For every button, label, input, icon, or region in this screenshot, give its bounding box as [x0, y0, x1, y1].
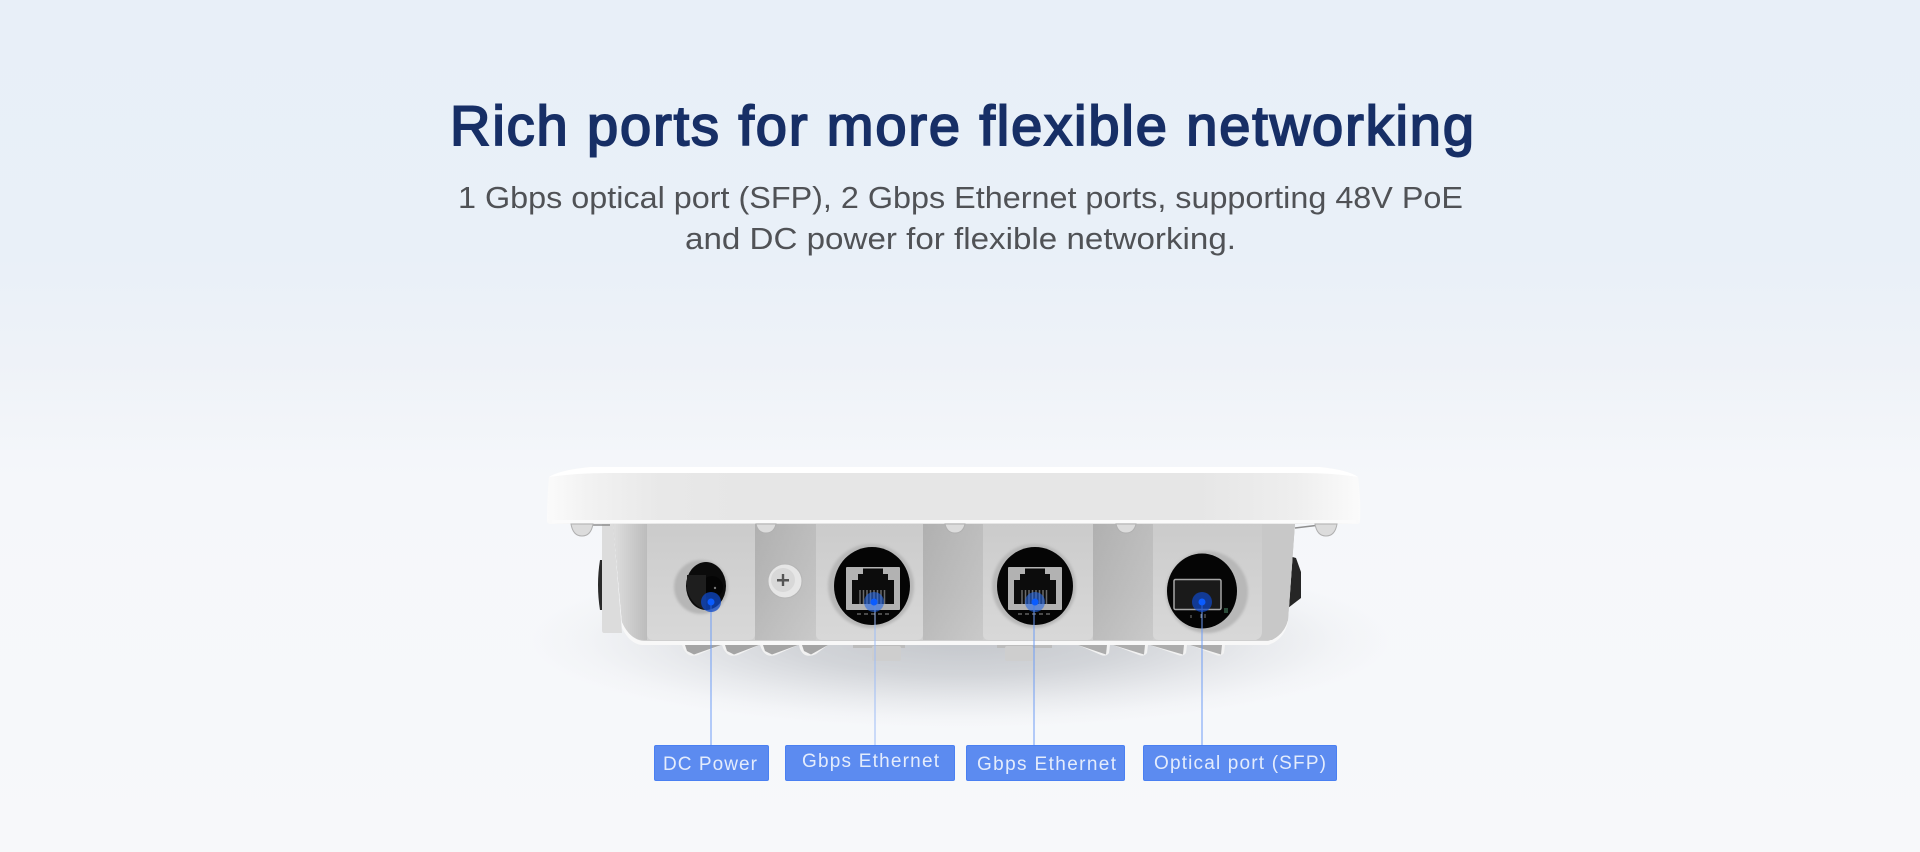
- callout line: Optical port: [1201, 602, 1203, 745]
- port panel 3: [983, 523, 1093, 640]
- label: Optical port (SFP): Optical port (SFP): [1154, 753, 1326, 774]
- marker: DC Power: [701, 592, 721, 612]
- label: Optical port (SFP): [1144, 746, 1336, 780]
- Ethernet port 2: [992, 544, 1076, 628]
- label: DC Power: DC Power: [663, 754, 758, 775]
- lid rods: [590, 525, 1320, 528]
- marker: Gbps Ethernet 1: [864, 592, 884, 612]
- label: Gbps Ethernet 2: [966, 746, 1124, 780]
- port panel 1: [647, 523, 755, 640]
- lid bottom highlight: [552, 520, 1356, 523]
- subtitle: 1 Gbps optical port (SFP), 2 Gbps Ethernet ports, supporting 48V PoE: [458, 180, 1463, 215]
- lid: [547, 467, 1360, 524]
- title: Rich ports for more flexible networking: [450, 94, 1474, 157]
- left wing: [602, 523, 622, 633]
- gap shading: [755, 524, 1153, 640]
- label: DC Power: [654, 746, 768, 780]
- marker: Gbps Ethernet 2: [1025, 592, 1045, 612]
- device: outdoor access point, port side: [547, 467, 1360, 661]
- callout line: Gbps Ethernet 1: [874, 602, 876, 745]
- SFP optical port: [1166, 551, 1248, 633]
- port panel 4: [1153, 523, 1262, 640]
- callout line: Gbps Ethernet 2: [1033, 602, 1035, 745]
- body recessed face: [613, 523, 1295, 641]
- left side connector: [598, 560, 606, 610]
- callout line: DC Power: [710, 602, 712, 745]
- bottom plugs: [853, 645, 1052, 661]
- Ethernet port 1: [828, 544, 914, 628]
- label: Gbps Ethernet 2: Gbps Ethernet: [977, 754, 1117, 775]
- left section: [613, 523, 647, 640]
- body: [613, 523, 1295, 645]
- marker: Optical port: [1192, 592, 1212, 612]
- subtitle: and DC power for flexible networking.: [685, 221, 1236, 256]
- lid top highlight: [549, 467, 1358, 477]
- DC power port: [674, 560, 728, 614]
- device shadow: [530, 552, 1390, 728]
- right side connector: [1288, 556, 1301, 608]
- mounting screw: [768, 564, 802, 598]
- screws under lid: [571, 524, 1337, 536]
- feet: [682, 645, 1225, 656]
- port panel 2: [816, 523, 923, 640]
- subtitle: [458, 180, 1463, 256]
- right face: [1256, 523, 1295, 640]
- label: Gbps Ethernet 1: [786, 746, 954, 780]
- label: Gbps Ethernet 1: Gbps Ethernet: [802, 751, 940, 772]
